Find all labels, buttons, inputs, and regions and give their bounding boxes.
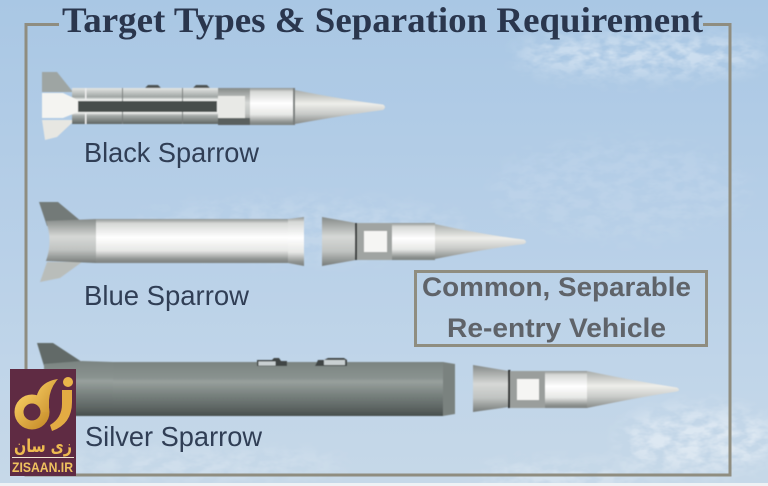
logo: Zisaan: [10, 369, 76, 476]
callout: common separable re-entry vehicle: [416, 272, 706, 346]
label: Blue Sparrow: Blue Sparrow: [84, 280, 250, 311]
label: Black Sparrow: Black Sparrow: [84, 137, 260, 168]
label: Silver Sparrow: Silver Sparrow: [85, 421, 263, 452]
callout: common separable re-entry vehicle: Common, Separable: [422, 272, 691, 302]
missile: Blue Sparrow re-entry vehicle: [322, 217, 526, 266]
title: Target Types & Separation Requirement: [62, 0, 703, 40]
missile: Silver Sparrow re-entry vehicle: [473, 365, 679, 412]
callout: common separable re-entry vehicle: Re-entry Vehicle: [447, 313, 666, 343]
logo: Zisaan: زی سان: [14, 436, 72, 457]
missile: Blue Sparrow booster: [39, 202, 304, 282]
missile: Black Sparrow: [42, 72, 385, 140]
missile: Silver Sparrow booster: [37, 343, 455, 416]
logo: Zisaan: ZISAAN.IR: [12, 459, 73, 475]
icon: gold dj monogram: [19, 377, 73, 431]
